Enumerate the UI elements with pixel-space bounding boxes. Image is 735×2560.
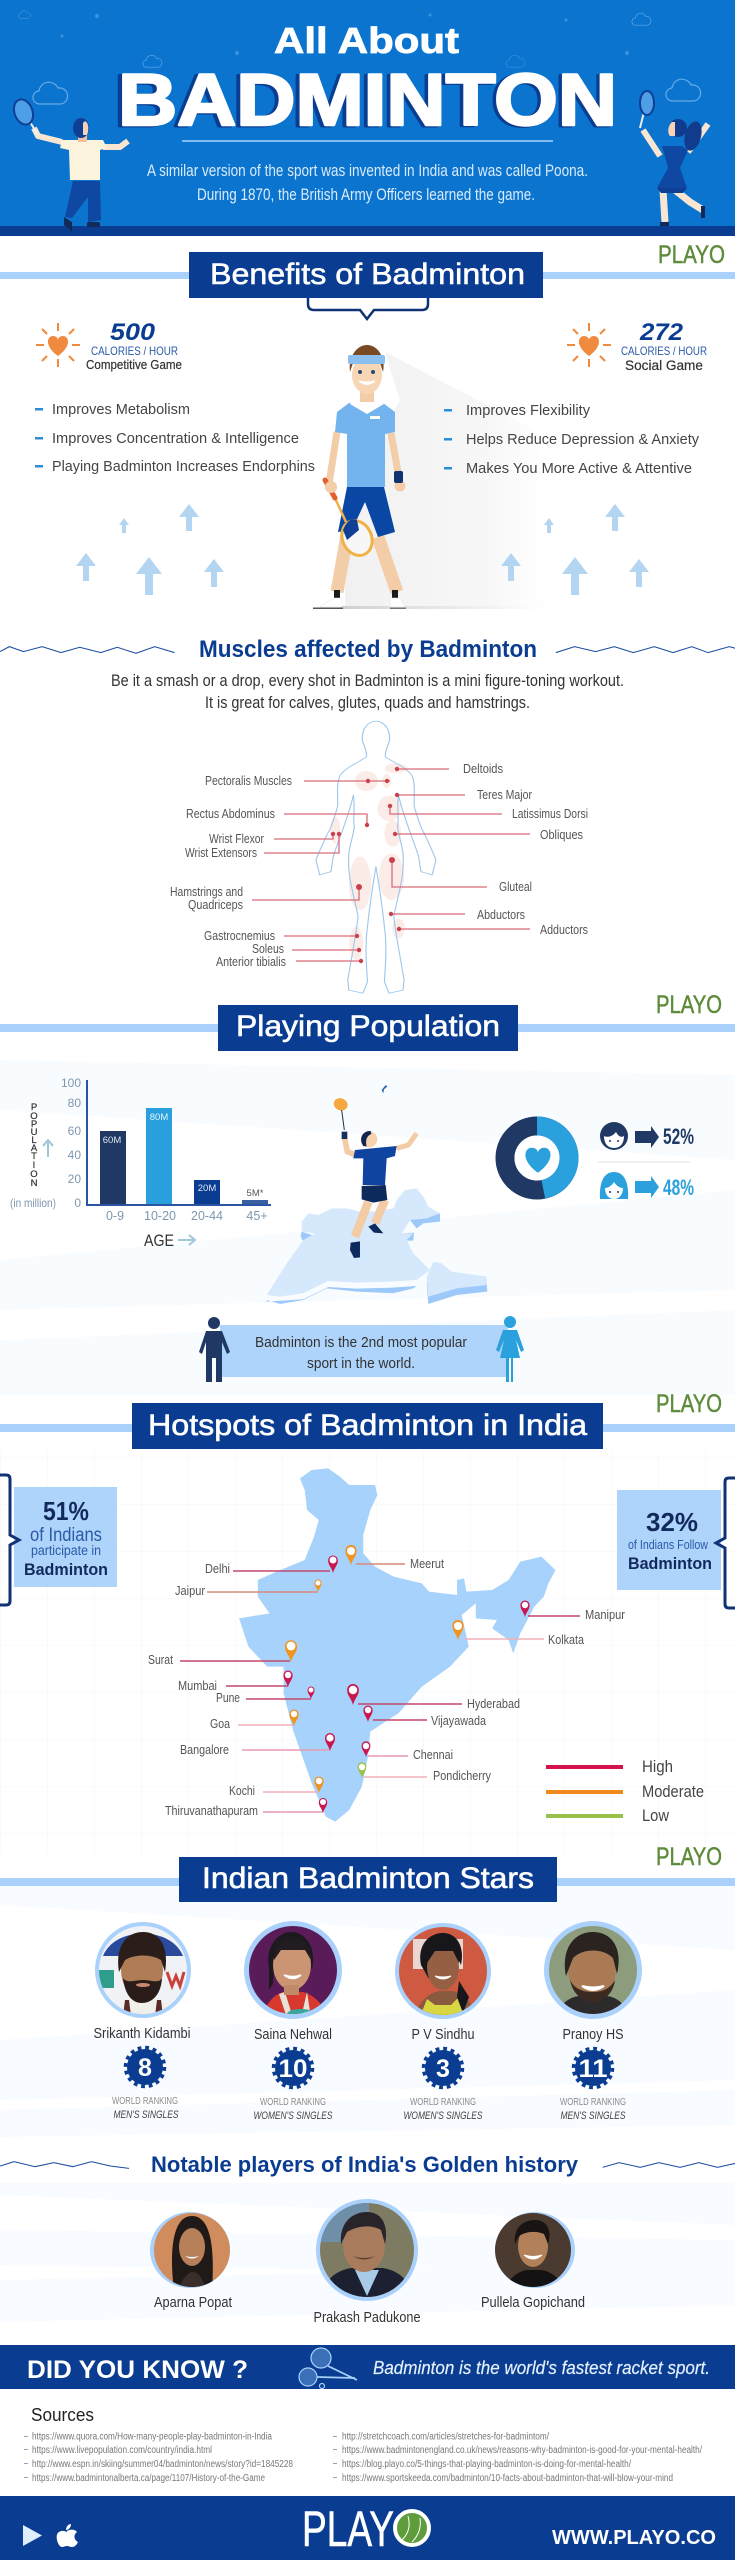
map: India hotspots: Thiruvanathapuram [165, 1803, 258, 1818]
banner: did you know: DID YOU KNOW ? [27, 2356, 248, 2384]
heading: muscles: Muscles affected by Badminton [199, 636, 537, 663]
icon: woman [496, 1316, 524, 1382]
muscles intro text [111, 671, 624, 712]
benefits list: right: Helps Reduce Depression & Anxiety [466, 431, 699, 448]
bar chart: population by age: U [31, 1127, 38, 1138]
map: India hotspots: Pondicherry [433, 1768, 491, 1783]
heading: notable players [0, 2152, 735, 2322]
icon: girl [600, 1172, 628, 1199]
benefits list: left: Improves Concentration & Intelligence [52, 430, 299, 447]
diagram: body muscles: Rectus Abdominus [186, 806, 275, 821]
sources list: http://www.espn.in/skiing/summer04/badminton/news/story?id=1845228 [32, 2459, 293, 2470]
banner: did you know [0, 2345, 735, 2389]
header panel [0, 0, 735, 236]
benefits list: left: Playing Badminton Increases Endorphins [52, 458, 315, 475]
callout: 51% participate: Badminton [24, 1560, 108, 1579]
heading: notable players: Notable players of India's Golden history [151, 2152, 578, 2177]
map: India hotspots: Mumbai [178, 1678, 217, 1693]
player: P V Sindhu [395, 1923, 491, 2122]
muscles intro text: Be it a smash or a drop, every shot in Badminton is a mini figure-toning workout. [111, 671, 624, 690]
title: Badminton: BADMINTON [114, 61, 614, 142]
badge: rank 10 [274, 2048, 312, 2088]
callout: 32% follow: Badminton [628, 1554, 712, 1573]
bar chart: population by age: 10-20 [144, 1209, 176, 1223]
bar chart: population by age: P [31, 1102, 37, 1113]
player: Pranoy HS [544, 1921, 642, 2122]
player: Prakash Padukone: Prakash Padukone [314, 2310, 420, 2326]
icon: rackets [299, 2348, 357, 2388]
callout: 32% follow: of Indians Follow [628, 1537, 708, 1552]
panel: social calories: Social Game [625, 358, 703, 373]
diagram: body muscles: Soleus [252, 941, 284, 956]
legend: hotspot levels: Low [642, 1807, 669, 1825]
callout: 51% participate: 51% [43, 1496, 89, 1526]
map: India hotspots: Surat [148, 1652, 173, 1667]
section band: Stars [0, 1857, 735, 2137]
light beam behind player [345, 352, 548, 608]
badge: rank 11: 11 [578, 2055, 608, 2083]
title: All About: All About [274, 20, 459, 61]
panel: social calories: CALORIES / HOUR [621, 344, 707, 358]
player: Prakash Padukone [314, 2199, 420, 2326]
diagram: body muscles: Latissimus Dorsi [512, 806, 588, 821]
badge: rank 8: 8 [138, 2054, 152, 2082]
benefits list: left [35, 401, 315, 475]
bar chart: population by age: 100 [61, 1076, 81, 1090]
diagram: body muscles [170, 721, 588, 993]
sources list: https://www.badmintonalberta.ca/page/1107/History-of-the-Game [32, 2473, 265, 2484]
panel: competitive calories: CALORIES / HOUR [91, 344, 178, 358]
diagram: body muscles: Pectoralis Muscles [205, 773, 292, 788]
legend: hotspot levels: Moderate [642, 1783, 704, 1801]
map: India hotspots: Delhi [205, 1561, 230, 1576]
badge: rank 11 [574, 2048, 612, 2088]
diagram: body muscles: Wrist Flexor [209, 831, 265, 846]
illustration: male player [11, 97, 128, 232]
bar chart: population by age: 40 [68, 1148, 81, 1162]
bar chart: population by age: 80M [150, 1112, 168, 1123]
panel: social calories: 272 [639, 319, 684, 346]
player: Pullela Gopichand: Pullela Gopichand [481, 2295, 585, 2311]
bar chart: population by age: O [30, 1111, 38, 1122]
benefits list: right: Improves Flexibility [466, 402, 590, 419]
header intro text: During 1870, the British Army Officers learned the game. [197, 185, 535, 204]
panel: social calories [567, 319, 707, 373]
panel: competitive calories [36, 319, 182, 372]
callout: 51% participate: participate in [31, 1543, 101, 1558]
bar chart: population by age: A [31, 1143, 38, 1154]
gender stats: 52% [663, 1124, 694, 1149]
callout: 2nd most popular sport: sport in the world. [307, 1356, 415, 1372]
player: Pullela Gopichand [481, 2210, 585, 2311]
map: India hotspots: Hyderabad [467, 1696, 520, 1711]
title: Badminton: BADMINTON [118, 60, 617, 141]
player: P V Sindhu: WOMEN'S SINGLES [404, 2110, 483, 2122]
callout: 32% follow [617, 1478, 735, 1608]
bar chart: population by age: 5M* [247, 1188, 264, 1199]
diagram: body muscles: Abductors [477, 907, 525, 922]
gender stats: 48% [663, 1175, 694, 1200]
badge: rank 8 [126, 2048, 164, 2086]
bar chart: population by age: 0-9 [106, 1209, 124, 1223]
section band: Benefits of Badminton: Benefits of Badminton [210, 258, 525, 291]
bar chart: population by age: N [31, 1178, 38, 1189]
section band: Hotspots: Hotspots of Badminton in India [148, 1409, 587, 1442]
illustration: standing player with racket [313, 345, 545, 609]
player: Pranoy HS: Pranoy HS [562, 2027, 624, 2043]
callout: 2nd most popular sport: Badminton is the 2nd most popular [255, 1335, 467, 1351]
map: India hotspots: Kochi [229, 1783, 255, 1798]
panel: competitive calories: Competitive Game [86, 358, 182, 372]
player: P V Sindhu: P V Sindhu [412, 2027, 474, 2043]
sources list: https://blog.playo.co/5-things-that-playing-badminton-is-doing-for-mental-health/ [342, 2459, 631, 2470]
bar chart: population by age: P [31, 1119, 37, 1130]
section band: Playing Population: Playing Population [236, 1010, 500, 1043]
player: Saina Nehwal [244, 1921, 342, 2122]
heading: muscles [0, 636, 735, 663]
diagram: body muscles: Deltoids [463, 761, 503, 776]
sources list: https://www.livepopulation.com/country/india.html [32, 2445, 212, 2456]
footer [0, 2496, 735, 2560]
section band: Benefits of Badminton [0, 252, 735, 319]
icon: heart sun [567, 323, 611, 367]
donut chart: gender split [505, 1126, 569, 1190]
benefits list: right: Makes You More Active & Attentive [466, 460, 692, 477]
player: Srikanth Kidambi: WORLD RANKING [112, 2095, 178, 2107]
player: Aparna Popat [150, 2210, 232, 2311]
player: Srikanth Kidambi: Srikanth Kidambi [94, 2026, 190, 2042]
diagram: body muscles: Gluteal [499, 879, 532, 894]
callout: 51% participate: of Indians [30, 1525, 102, 1546]
sources list [24, 2405, 702, 2484]
panel: competitive calories: 500 [110, 319, 156, 346]
player: Aparna Popat: Aparna Popat [154, 2295, 232, 2311]
section band: Hotspots [0, 1403, 735, 1855]
bar chart: population by age: T [31, 1151, 37, 1162]
diagram: body muscles: Quadriceps [188, 897, 243, 912]
sources list: http://stretchcoach.com/articles/stretches-for-badmintom/ [342, 2432, 549, 2442]
bar chart: population by age: 20M [198, 1183, 216, 1194]
legend: hotspot levels [546, 1758, 704, 1825]
section band: Playing Population [0, 1005, 735, 1395]
callout: 51% participate [0, 1475, 117, 1605]
diagram: body muscles: Adductors [540, 922, 588, 937]
badge: rank 3 [424, 2048, 462, 2088]
bar chart: population by age: 45+ [246, 1209, 268, 1223]
player: Saina Nehwal: WOMEN'S SINGLES [254, 2110, 333, 2122]
icon: boy [600, 1122, 628, 1150]
header intro text: A similar version of the sport was invented in India and was called Poona. [147, 161, 588, 180]
benefits list: left: Improves Metabolism [52, 401, 190, 418]
footer logo: PLAY [302, 2501, 394, 2557]
bar chart: population by age: AGE [144, 1231, 174, 1250]
player: Srikanth Kidambi: MEN'S SINGLES [114, 2109, 179, 2121]
player: Srikanth Kidambi [94, 1922, 191, 2121]
bar chart: population by age: 60M [103, 1135, 121, 1146]
bar chart: population by age: L [31, 1135, 37, 1146]
banner: did you know: Badminton is the world's fastest racket sport. [373, 2357, 710, 2378]
player: P V Sindhu: WORLD RANKING [410, 2096, 476, 2108]
bar chart: population by age: 20-44 [191, 1209, 223, 1223]
bar chart: population by age: (in million) [10, 1196, 56, 1210]
arrows up: left and right [76, 504, 649, 595]
map: India hotspots: Vijayawada [431, 1713, 487, 1728]
badge: rank 3: 3 [436, 2055, 450, 2083]
bar chart: population by age: 20 [68, 1172, 81, 1186]
illustration: player on India map [267, 1085, 487, 1304]
header intro text [147, 161, 588, 204]
bar chart: population by age: 80 [68, 1096, 81, 1110]
callout: 32% follow: 32% [646, 1507, 698, 1537]
diagram: body muscles: Wrist Extensors [185, 845, 257, 860]
map: India hotspots: Goa [210, 1716, 231, 1731]
sources list: https://www.quora.com/How-many-people-play-badminton-in-India [32, 2432, 272, 2442]
diagram: body muscles: Hamstrings and [170, 884, 243, 899]
player: Pranoy HS: WORLD RANKING [560, 2096, 626, 2108]
icon: heart sun [36, 323, 80, 367]
website: WWW.PLAYO.CO [552, 2527, 716, 2549]
icon: heart [525, 1148, 551, 1173]
illustration: female player [640, 91, 708, 226]
icon: man [199, 1317, 230, 1382]
map: India hotspots: Manipur [585, 1607, 626, 1622]
map: India hotspots: Bangalore [180, 1742, 229, 1757]
legend: hotspot levels: High [642, 1758, 673, 1776]
icon: apple [57, 2524, 78, 2547]
diagram: body muscles: Gastrocnemius [204, 928, 275, 943]
map: India hotspots [148, 1468, 626, 1822]
player: Saina Nehwal: WORLD RANKING [260, 2096, 326, 2108]
muscles intro text: It is great for calves, glutes, quads and hamstrings. [205, 693, 530, 712]
benefits list: right [444, 402, 699, 477]
map: India hotspots: Jaipur [175, 1583, 206, 1598]
diagram: body muscles: Obliques [540, 827, 583, 842]
map: India hotspots: Chennai [413, 1747, 453, 1762]
bar chart: population by age: 0 [74, 1196, 81, 1210]
player: Saina Nehwal: Saina Nehwal [254, 2027, 332, 2043]
bar chart: population by age: 60 [68, 1124, 81, 1138]
bar chart: population by age: O [30, 1169, 38, 1180]
gender stats [598, 1122, 694, 1200]
diagram: body muscles: Teres Major [477, 787, 533, 802]
callout: 2nd most popular sport [199, 1316, 524, 1382]
bar chart: population by age [10, 1076, 271, 1250]
icon: play store [23, 2525, 42, 2546]
badge: rank 10: 10 [278, 2055, 308, 2083]
section band: Stars: Indian Badminton Stars [202, 1862, 534, 1895]
sources list: Sources [31, 2405, 94, 2425]
map: India hotspots: Pune [216, 1690, 240, 1705]
player: Pranoy HS: MEN'S SINGLES [560, 2110, 626, 2122]
bar chart: population by age: I [33, 1160, 35, 1171]
map: India hotspots: Meerut [410, 1556, 444, 1571]
diagram: body muscles: Anterior tibialis [216, 954, 286, 969]
map: India hotspots: Kolkata [548, 1632, 585, 1647]
